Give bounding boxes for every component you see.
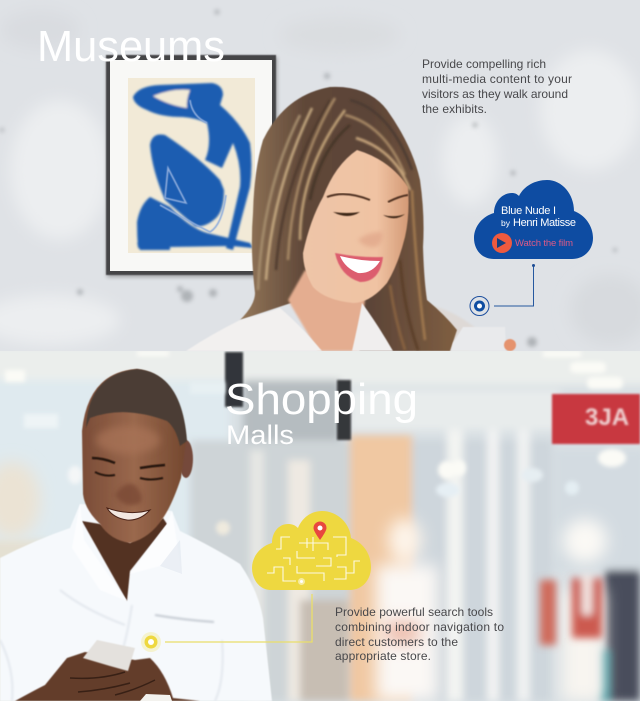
- cloud callout: Blue Nude: Watch the film: [515, 238, 573, 249]
- title: Shopping Malls: Shopping: [225, 375, 418, 424]
- title: Shopping Malls: [227, 382, 415, 444]
- head: [82, 369, 186, 543]
- description text: appropriate store.: [335, 649, 431, 663]
- nose shade: [115, 484, 142, 505]
- cloud callout: Blue Nude: by: [501, 218, 511, 228]
- cloud callout: Blue Nude: Henri Matisse: [513, 217, 576, 229]
- blurred mall background: 3JA: [585, 404, 629, 431]
- blurred mall background: [0, 345, 640, 701]
- connector line and hotspot: [470, 264, 535, 316]
- panel: shopping malls: [0, 345, 640, 701]
- neck: [288, 270, 365, 351]
- description text: [335, 605, 504, 663]
- brows and eyes: [92, 458, 165, 480]
- description text: Provide compelling rich: [422, 57, 546, 71]
- woman with smartphone: [186, 87, 516, 351]
- eyes: [333, 212, 405, 218]
- forehead highlight: [96, 426, 160, 454]
- hair: [240, 87, 457, 351]
- description text: [422, 57, 572, 116]
- hair: [86, 369, 187, 446]
- right shoulder: [436, 307, 473, 350]
- nose shade: [358, 232, 382, 247]
- face: [303, 150, 409, 303]
- description text: the exhibits.: [422, 102, 487, 116]
- description text: multi-media content to your: [422, 72, 572, 86]
- description text: Provide powerful search tools: [335, 605, 493, 619]
- description text: direct customers to the: [335, 635, 458, 649]
- description text: visitors as they walk around: [422, 87, 568, 101]
- brows: [327, 194, 408, 202]
- shirt: [0, 504, 272, 701]
- museum wall background: [0, 0, 640, 351]
- description text: combining indoor navigation to: [335, 620, 504, 634]
- title: Shopping Malls: Malls: [226, 420, 294, 450]
- framed painting: Blue Nude I: [106, 55, 277, 277]
- smile: [107, 508, 150, 520]
- icon: map pin: [314, 522, 326, 540]
- smile: [335, 253, 383, 282]
- title: Museums: Museums: [37, 22, 225, 71]
- white shirt: [186, 308, 322, 351]
- ear: [179, 440, 193, 478]
- hand and phone: [451, 327, 506, 351]
- panel: museums: [0, 0, 640, 351]
- connector line and hotspot: [141, 594, 312, 652]
- cloud callout: Blue Nude: Blue Nude I: [501, 205, 556, 217]
- hands and phone: [15, 652, 200, 701]
- cloud: indoor navigation map: [252, 511, 371, 590]
- smiling man with smartphone: [0, 369, 272, 701]
- cloud callout: Blue Nude: [474, 180, 593, 259]
- blurred mannequins: [376, 518, 607, 701]
- icon: play button: [492, 233, 512, 253]
- neck: [82, 518, 167, 601]
- collar: [81, 520, 168, 600]
